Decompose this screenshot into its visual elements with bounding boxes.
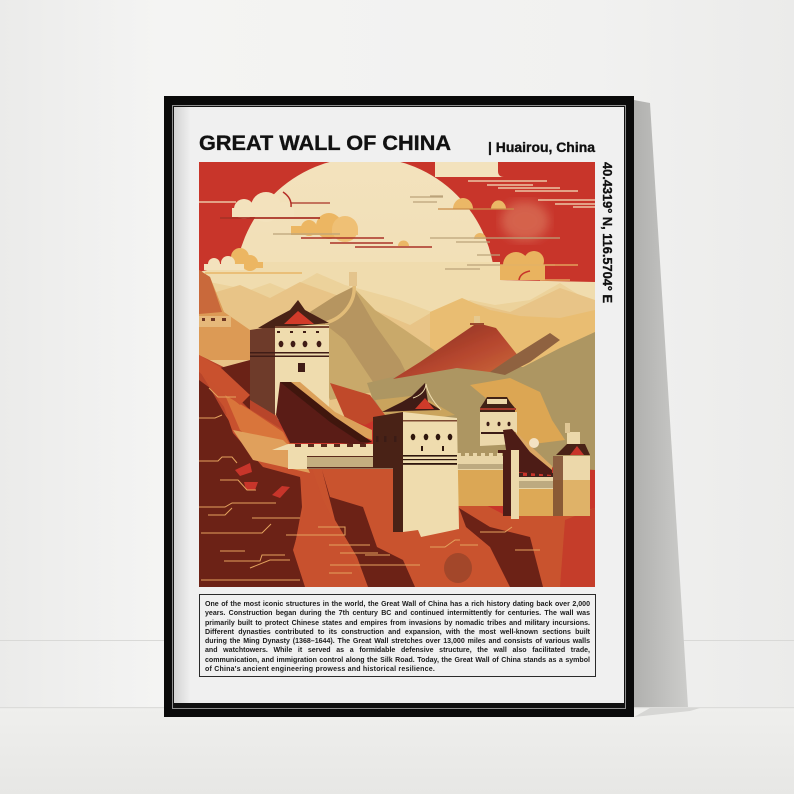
cloud: lower right xyxy=(500,251,545,280)
brown ridge xyxy=(490,333,560,375)
cloud: right small xyxy=(398,198,506,246)
coordinates: 40.4319° N, 116.5704° E xyxy=(600,162,615,303)
winding wall xyxy=(325,284,354,323)
tower 2 xyxy=(373,412,403,532)
tower 3 xyxy=(480,412,517,446)
smudge xyxy=(444,553,472,583)
description text box: of China's ancient engineering prowess and historical resilience. xyxy=(205,666,435,673)
description text box: years. Construction began during the 7th century BC and continued intermittently for centuries. The wall was xyxy=(205,610,590,617)
red mountain xyxy=(393,323,523,379)
title: GREAT WALL OF CHINA xyxy=(199,132,451,155)
tower 4 xyxy=(553,456,590,516)
cloud: lower left xyxy=(228,248,263,271)
dark cliff centre xyxy=(322,470,415,587)
wall section 3 xyxy=(518,476,564,516)
cloud: orange xyxy=(291,213,342,239)
stairway 2 xyxy=(503,429,552,475)
sun xyxy=(241,162,493,262)
dark cliff left xyxy=(199,380,307,587)
cloud: left cream xyxy=(232,192,274,219)
mountain with winding wall xyxy=(310,287,437,400)
wall section 2 xyxy=(457,456,507,506)
strata lines xyxy=(199,388,540,580)
wall section 1 xyxy=(288,444,395,448)
description text box: primarily built to protect Chinese states and empires from invasions by nomadic tribes and military incursions. xyxy=(205,620,590,627)
description text box: Different dynasties contributed to its construction and expansion, with the most well-known sections built xyxy=(205,629,590,636)
illustration: Great Wall xyxy=(199,162,595,587)
red accents xyxy=(235,463,252,476)
description text box: and watchtowers. While it served as a formidable defensive structure, the wall also facilitated trade, xyxy=(205,647,590,654)
red sky xyxy=(199,162,595,530)
sky speckle xyxy=(501,201,549,241)
description text box: during the Ming Dynasty (1368–1644). The Great Wall stretches over 13,000 miles and consists of various walls xyxy=(205,638,590,645)
description text box xyxy=(199,594,596,677)
location label: | Huairou, China xyxy=(488,139,595,155)
terraced slopes behind tower xyxy=(330,383,385,425)
column xyxy=(503,450,511,516)
description text box: communication, and immigration control along the Silk Road. Today, the Great Wall of China stands as a symbol xyxy=(205,657,590,664)
shaded ledge xyxy=(220,360,250,410)
foreground base xyxy=(225,414,594,587)
stairway 1 xyxy=(276,382,372,445)
description text box: One of the most iconic structures in the world, the Great Wall of China has a rich history dating back over 2,000 xyxy=(205,601,590,608)
orange ridge xyxy=(202,374,307,587)
sand patches xyxy=(470,378,565,445)
far mountains xyxy=(212,273,576,325)
dark cliff right xyxy=(459,508,543,587)
top cloud xyxy=(435,162,504,177)
distant wall left xyxy=(199,316,231,327)
olive mountain xyxy=(367,332,595,470)
lower sky band xyxy=(202,262,595,305)
left distant hill xyxy=(199,270,250,360)
horizontal cloud lines xyxy=(199,181,595,280)
